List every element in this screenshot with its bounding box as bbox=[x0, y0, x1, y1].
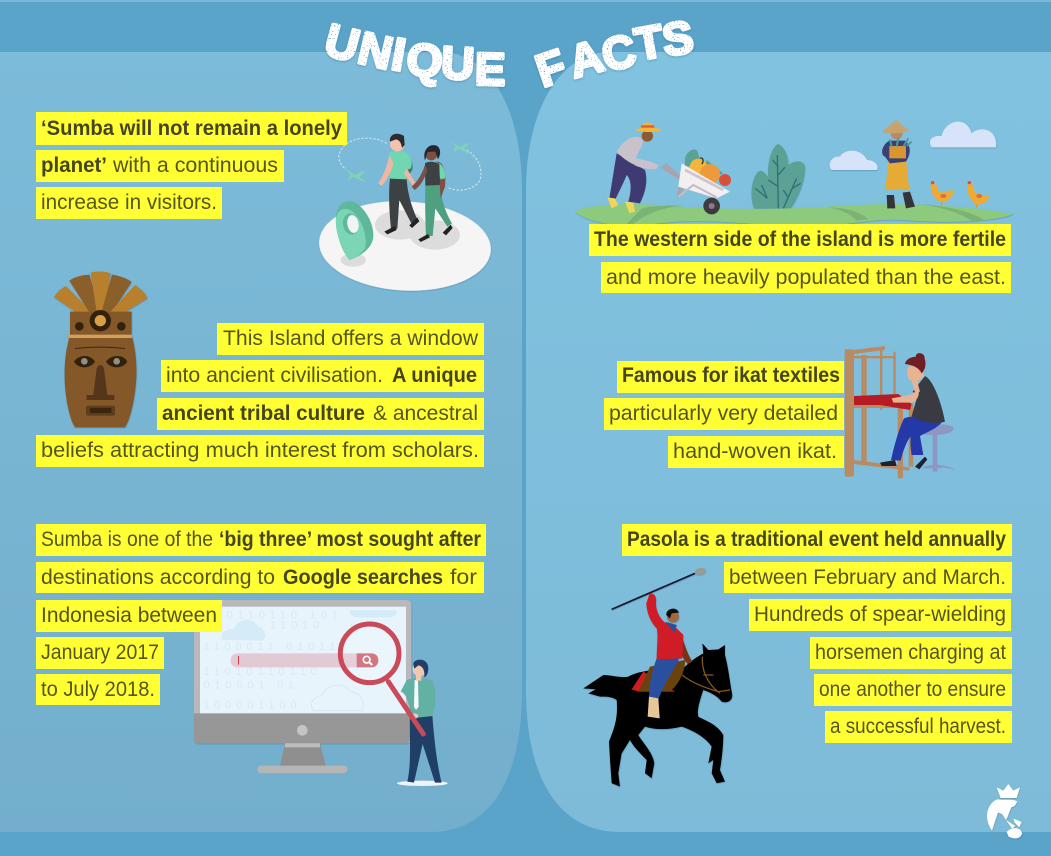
farmer bbox=[607, 122, 662, 213]
woman walking bbox=[412, 145, 453, 242]
screen bbox=[200, 607, 406, 713]
text block: fertile west: and more heavily populated than the east. bbox=[606, 266, 1006, 289]
title: UNIQUE FACTS: T bbox=[631, 14, 668, 70]
stand bbox=[280, 743, 326, 766]
plant bbox=[752, 144, 805, 208]
nose bbox=[87, 365, 114, 400]
forehead band bbox=[68, 335, 132, 338]
ground bbox=[575, 204, 1014, 227]
weaver bbox=[880, 353, 945, 469]
text block: fertile west bbox=[589, 224, 1011, 293]
illustration: tribal mask bbox=[54, 271, 147, 427]
panel: right bbox=[526, 52, 1051, 832]
ground shadows bbox=[341, 210, 460, 267]
text block: ancient civilisation bbox=[36, 323, 484, 467]
text block: Pasola bbox=[622, 524, 1012, 743]
map bbox=[987, 799, 1017, 831]
text block: big three: ‘big three’ most sought after bbox=[219, 528, 481, 551]
binary digits: 100001100 bbox=[203, 699, 301, 711]
text block: ancient civilisation: A unique bbox=[392, 364, 477, 387]
text block: big three: for bbox=[450, 566, 477, 589]
stool bbox=[916, 424, 956, 472]
text block: big three bbox=[36, 524, 486, 705]
text block: Pasola: horsemen charging at bbox=[815, 641, 1006, 664]
text block: Pasola: Pasola is a traditional event held annually bbox=[627, 528, 1006, 551]
title: UNIQUE FACTS: C bbox=[597, 23, 640, 81]
person bbox=[401, 660, 442, 783]
illustration: weaver at loom bbox=[845, 346, 956, 478]
text block: big three: Google searches bbox=[283, 566, 443, 589]
text block: lonely planet: with a continuous bbox=[112, 154, 278, 177]
text block: big three: Indonesia between bbox=[41, 604, 217, 627]
text block: ancient civilisation: This Island offers a window bbox=[223, 327, 479, 350]
white disc bbox=[317, 197, 493, 295]
search bar bbox=[231, 653, 357, 667]
text block: ancient civilisation: ancient tribal culture bbox=[162, 402, 365, 425]
bridle bbox=[682, 657, 730, 693]
title: UNIQUE FACTS bbox=[319, 10, 697, 97]
jewel bbox=[90, 310, 111, 331]
crown bbox=[997, 784, 1020, 798]
loom frame bbox=[845, 346, 913, 478]
title: UNIQUE FACTS: A bbox=[563, 29, 609, 88]
panel: left bbox=[0, 52, 522, 832]
binary digits: 11010 bbox=[270, 619, 324, 631]
monitor bbox=[194, 600, 411, 743]
monitor button bbox=[297, 725, 308, 736]
magnifying glass bbox=[340, 624, 423, 734]
title: UNIQUE FACTS: S bbox=[659, 10, 697, 66]
rider bbox=[646, 593, 692, 718]
text block: ancient civilisation: & ancestral bbox=[373, 402, 478, 425]
illustration: farm scene bbox=[575, 120, 1014, 227]
title: UNIQUE FACTS: U bbox=[319, 13, 365, 72]
binary digits: 11010110110 bbox=[203, 666, 321, 678]
binary digits: 0110110 101 bbox=[227, 609, 342, 621]
red warp bbox=[854, 394, 912, 410]
text block: big three: Sumba is one of the bbox=[41, 528, 213, 551]
illustration: computer search bbox=[194, 600, 448, 786]
spear bbox=[612, 573, 695, 609]
eyes bbox=[74, 356, 95, 367]
mask face bbox=[65, 312, 136, 427]
headdress feathers bbox=[54, 271, 147, 322]
horse bbox=[583, 643, 732, 787]
text block: lonely planet: ‘Sumba will not remain a lonely bbox=[41, 117, 342, 140]
text block: big three: destinations according to bbox=[41, 566, 275, 589]
text block: Pasola: one another to ensure bbox=[819, 678, 1006, 701]
chickens bbox=[931, 181, 990, 207]
title: UNIQUE FACTS: N bbox=[354, 21, 398, 79]
saddle cloth bbox=[632, 672, 675, 692]
clouds on screen bbox=[221, 620, 265, 641]
text block: ancient civilisation: into ancient civilisation. bbox=[166, 364, 383, 387]
text block: Pasola: a successful harvest. bbox=[830, 715, 1006, 738]
brow bbox=[75, 347, 125, 349]
farm woman bbox=[882, 120, 915, 208]
text block: ikat: Famous for ikat textiles bbox=[622, 364, 840, 387]
planes bbox=[344, 141, 471, 181]
field stripes bbox=[625, 204, 985, 225]
top band highlight bbox=[0, 0, 1051, 2]
text block: lonely planet: planet’ bbox=[41, 154, 107, 177]
clouds bbox=[830, 122, 996, 170]
text block: ikat bbox=[604, 361, 844, 468]
text block: ikat: hand-woven ikat. bbox=[673, 440, 837, 463]
map pin bbox=[336, 201, 373, 260]
text block: Pasola: Hundreds of spear-wielding bbox=[754, 603, 1006, 626]
text block: fertile west: The western side of the island is more fertile bbox=[594, 228, 1006, 251]
person shadow bbox=[397, 781, 448, 786]
binary digits bbox=[203, 609, 342, 711]
mouth bbox=[86, 406, 115, 416]
title: UNIQUE FACTS: Q bbox=[404, 32, 445, 88]
title: UNIQUE FACTS: E bbox=[474, 43, 506, 95]
illustration: Pasola horseman bbox=[583, 567, 732, 787]
text block: ancient civilisation: beliefs attracting much interest from scholars. bbox=[41, 439, 479, 462]
text block: Pasola: between February and March. bbox=[729, 566, 1006, 589]
binary digits: 010001 01 bbox=[203, 679, 299, 691]
title: UNIQUE FACTS: F bbox=[529, 39, 573, 97]
title: UNIQUE FACTS: U bbox=[440, 36, 476, 90]
dashed flight paths bbox=[339, 138, 481, 190]
text block: big three: January 2017 bbox=[41, 641, 159, 664]
logo: crown and map bbox=[987, 784, 1022, 838]
title: UNIQUE FACTS: I bbox=[388, 28, 410, 81]
wheelbarrow bbox=[660, 149, 731, 214]
illustration: travellers on a map disc bbox=[317, 134, 493, 295]
man walking bbox=[378, 134, 419, 234]
text block: lonely planet bbox=[36, 112, 347, 219]
text block: ikat: particularly very detailed bbox=[609, 402, 838, 425]
binary digits: 1100011 01011 bbox=[203, 641, 340, 653]
text block: big three: to July 2018. bbox=[41, 678, 155, 701]
text block: lonely planet: increase in visitors. bbox=[41, 191, 217, 214]
